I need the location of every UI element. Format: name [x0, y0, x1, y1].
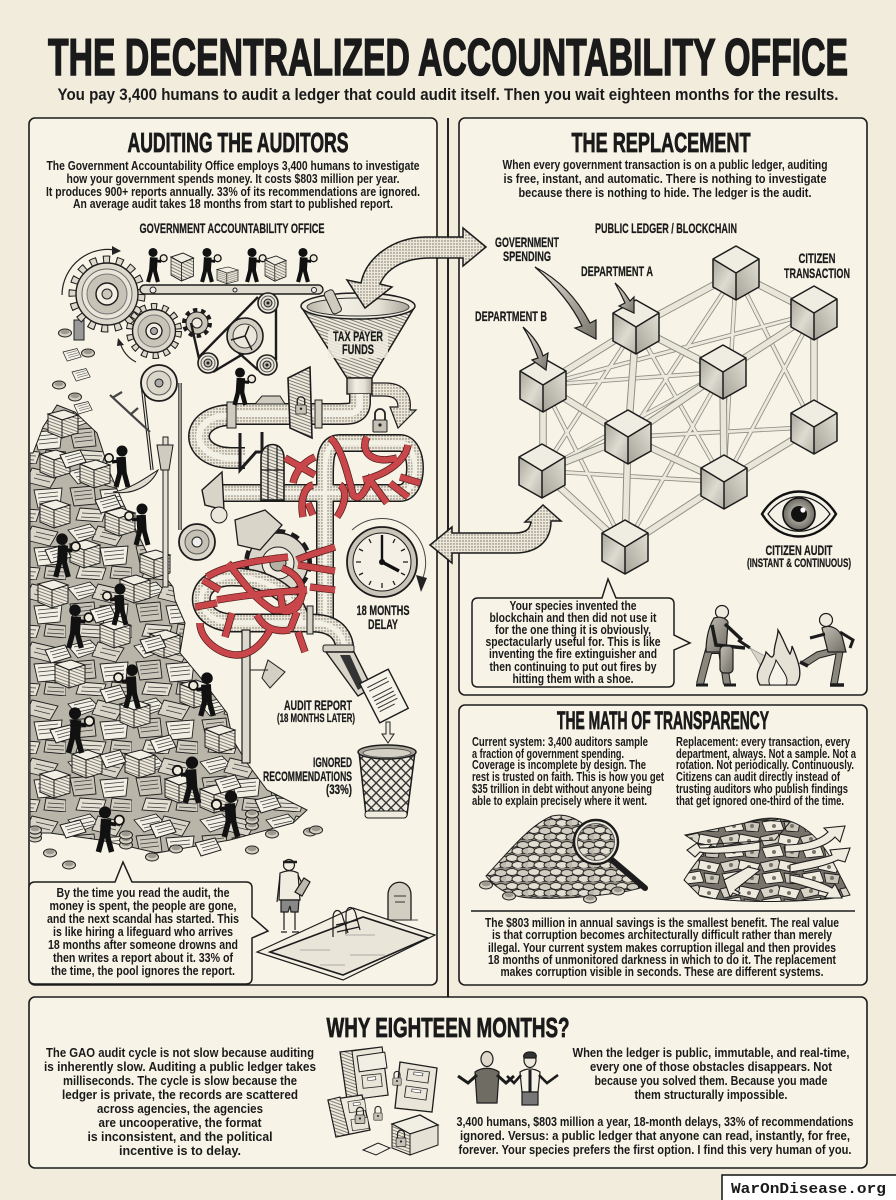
text: when the ledger is public: [572, 1045, 850, 1102]
label: citizen transaction: TRANSACTION: [784, 265, 850, 281]
text: current system: Current system: 3,400 auditors sample: [472, 735, 648, 749]
intro text block: because there is nothing to hide. The ledger is the audit.: [518, 185, 812, 200]
callout: fire extinguisher: hitting them with a shoe.: [512, 671, 634, 686]
callout: fire extinguisher: for the one thing it is obviously,: [495, 622, 651, 637]
callout: fire extinguisher: spectacularly useful for. This is like: [486, 634, 660, 649]
small arrow from pipe: [372, 383, 416, 428]
label: citizen transaction: [784, 250, 850, 281]
icon: gears: [62, 246, 209, 362]
label: government spending: GOVERNMENT: [495, 234, 559, 250]
text: current system: a fraction of government spending.: [472, 747, 624, 761]
icon: money pile with arrows: [684, 818, 850, 902]
text: why the cycle is slow: is inherently slow. Auditing a public ledger takes: [44, 1059, 316, 1074]
callout: lifeguard: and the next scandal has started. This: [47, 911, 239, 926]
center divider line: [447, 118, 449, 997]
text: conclusion: ignored. Versus: a public ledger that anyone can read, instantly, for free,: [460, 1128, 850, 1143]
icon: taxpayer funnel: FUNDS: [342, 341, 374, 357]
text: conclusion: [456, 1114, 854, 1157]
text: replacement: [676, 735, 857, 808]
icon: person with extinguisher: [696, 606, 776, 685]
callout: lifeguard: is like hiring a lifeguard who arrives: [53, 924, 233, 939]
text: current system: $35 trillion in debt without anyone being: [472, 782, 652, 796]
icon: lifeguard: [277, 860, 310, 932]
text: when the ledger is public: because you solved them. Because you made: [594, 1073, 828, 1088]
text: real value: makes corruption visible in seconds. These are different systems.: [500, 964, 824, 979]
icon: falling money: [52, 320, 94, 414]
text: why the cycle is slow: incentive is to delay.: [119, 1143, 241, 1158]
icon: taxpayer funnel: TAX PAYER: [333, 328, 383, 344]
callout: lifeguard: the time, the pool ignores the report.: [51, 963, 235, 978]
text: why the cycle is slow: [44, 1045, 316, 1158]
icon: upper pipes: [199, 367, 416, 470]
icon: down arrow: [382, 722, 394, 743]
icon: pointer arrows to nodes: [523, 267, 634, 370]
icon: belts and pulleys: [110, 293, 278, 587]
text: current system: [472, 735, 665, 808]
icon: gate: [261, 444, 284, 500]
icon: wastebasket: [358, 745, 416, 818]
icon: conveyor with auditors and paper stacks: [140, 248, 323, 294]
callout: fire extinguisher: inventing the fire extinguisher and: [489, 646, 657, 661]
intro text block: [502, 157, 828, 200]
text: when the ledger is public: When the ledger is public, immutable, and real-time,: [572, 1045, 850, 1060]
panel: the replacement: [459, 118, 867, 695]
label: 18 months delay: 18 MONTHS: [356, 602, 410, 618]
label: ignored recommendations: IGNORED: [313, 754, 352, 770]
icon: audit report document: [360, 669, 408, 723]
callout: fire extinguisher: then continuing to put out fires by: [490, 659, 657, 674]
network links: [542, 273, 814, 547]
broken gear: [211, 507, 308, 593]
text: replacement: Citizens can audit directly instead of: [676, 770, 841, 784]
label: ignored recommendations: RECOMMENDATIONS: [263, 768, 352, 784]
auditor on pipe: [235, 368, 255, 405]
icon: pool: [257, 908, 435, 980]
label: citizen audit: (INSTANT & CONTINUOUS): [747, 558, 851, 570]
icon: eye: [762, 492, 836, 536]
label: ignored recommendations: (33%): [326, 781, 352, 797]
heading: auditing the auditors: AUDITING THE AUDITORS: [128, 127, 348, 158]
text: why the cycle is slow: across agencies, the agencies: [97, 1101, 263, 1116]
label: department a: DEPARTMENT A: [581, 263, 653, 279]
label: government accountability office: GOVERNMENT ACCOUNTABILITY OFFICE: [140, 220, 324, 236]
label: citizen audit: [747, 542, 851, 570]
text: why the cycle is slow: are uncooperative, the format: [98, 1115, 262, 1130]
label: audit report: AUDIT REPORT: [284, 697, 352, 713]
label: ignored recommendations: [263, 754, 352, 797]
watermark: [722, 1175, 896, 1200]
text: replacement: that get ignored one-third of the time.: [676, 794, 844, 808]
intro text block: The Government Accountability Office employs 3,400 humans to investigate: [46, 158, 420, 173]
icon: fire: [757, 630, 800, 685]
intro text block: An average audit takes 18 months from start to published report.: [73, 196, 393, 211]
intro text block: [46, 158, 420, 211]
panel: auditing the auditors: [28, 118, 437, 985]
callout: lifeguard: money is spent, the people are gone,: [50, 898, 236, 913]
blockchain network: [519, 246, 837, 574]
callout: lifeguard: [29, 862, 268, 984]
intro text block: It produces 900+ reports annually. 33% of its recommendations are ignored.: [46, 184, 420, 199]
callout: lifeguard: 18 months after someone drowns and: [48, 937, 238, 952]
text: why the cycle is slow: is inconsistent, and the political: [88, 1129, 272, 1144]
icon: tombstone: [382, 882, 418, 920]
heading: the replacement: THE REPLACEMENT: [572, 127, 750, 158]
callout: fire extinguisher: [472, 579, 690, 687]
icon: door in pipe: [288, 367, 312, 438]
text: why the cycle is slow: ledger is private, the records are scattered: [62, 1087, 298, 1102]
label: public ledger: PUBLIC LEDGER / BLOCKCHAIN: [595, 220, 737, 236]
intro text block: is free, instant, and automatic. There is nothing to investigate: [504, 171, 826, 186]
text: current system: able to explain precisely where it went.: [472, 794, 647, 808]
ledger nodes: [519, 246, 837, 574]
icon: clock: [347, 519, 427, 597]
label: 18 months delay: DELAY: [368, 616, 398, 632]
icon: lower tangled pipes: [201, 409, 415, 763]
dotted return arrow: [430, 505, 561, 563]
label: audit report: [277, 697, 355, 725]
label: audit report: (18 MONTHS LATER): [277, 713, 355, 725]
panel: why eighteen months: [29, 997, 867, 1168]
text: why the cycle is slow: milliseconds. The cycle is slow because the: [63, 1073, 297, 1088]
label: citizen audit: CITIZEN AUDIT: [766, 542, 833, 558]
text: when the ledger is public: every one of those obstacles disappears. Not: [590, 1059, 833, 1074]
label: government spending: SPENDING: [503, 248, 551, 264]
icon: taxpayer funnel: [301, 289, 415, 394]
label: 18 months delay: [356, 602, 410, 632]
icon: padlock: [373, 409, 387, 432]
icon: person kicking fire with shoe: [800, 614, 853, 685]
text: current system: rest is trusted on faith. This is how you get: [472, 770, 665, 784]
icon: two shrugging people: [458, 1052, 558, 1105]
text: real value: [485, 915, 839, 979]
callout: lifeguard: By the time you read the audit, the: [56, 885, 230, 900]
red tape: [195, 437, 420, 655]
callout: fire extinguisher: blockchain and then did not use it: [490, 610, 657, 625]
paper pile with auditors: [28, 405, 322, 869]
label: citizen transaction: CITIZEN: [798, 250, 836, 266]
heading: why eighteen months: WHY EIGHTEEN MONTHS?: [326, 1012, 570, 1043]
text: why the cycle is slow: The GAO audit cycle is not slow because auditing: [46, 1045, 314, 1060]
panel: math of transparency: [459, 705, 867, 985]
callout: fire extinguisher: Your species invented the: [510, 598, 636, 613]
label: department b: DEPARTMENT B: [475, 308, 547, 324]
icons: auditors on pile: [56, 446, 238, 852]
intro text block: how your government spends money. It costs $803 million per year.: [66, 171, 400, 186]
big dotted arrow into funnel: [347, 228, 486, 308]
watermark: WarOnDisease.org: [731, 1181, 886, 1198]
icon: coin pile with magnifier: [480, 815, 645, 903]
callout: lifeguard: then writes a report about it. 33% of: [53, 950, 234, 965]
text: current system: Coverage is incomplete by design. The: [472, 758, 646, 772]
text: when the ledger is public: them structurally impossible.: [634, 1087, 788, 1102]
icon: locked filing cabinets: [328, 1047, 438, 1155]
label: government spending: [495, 234, 559, 264]
